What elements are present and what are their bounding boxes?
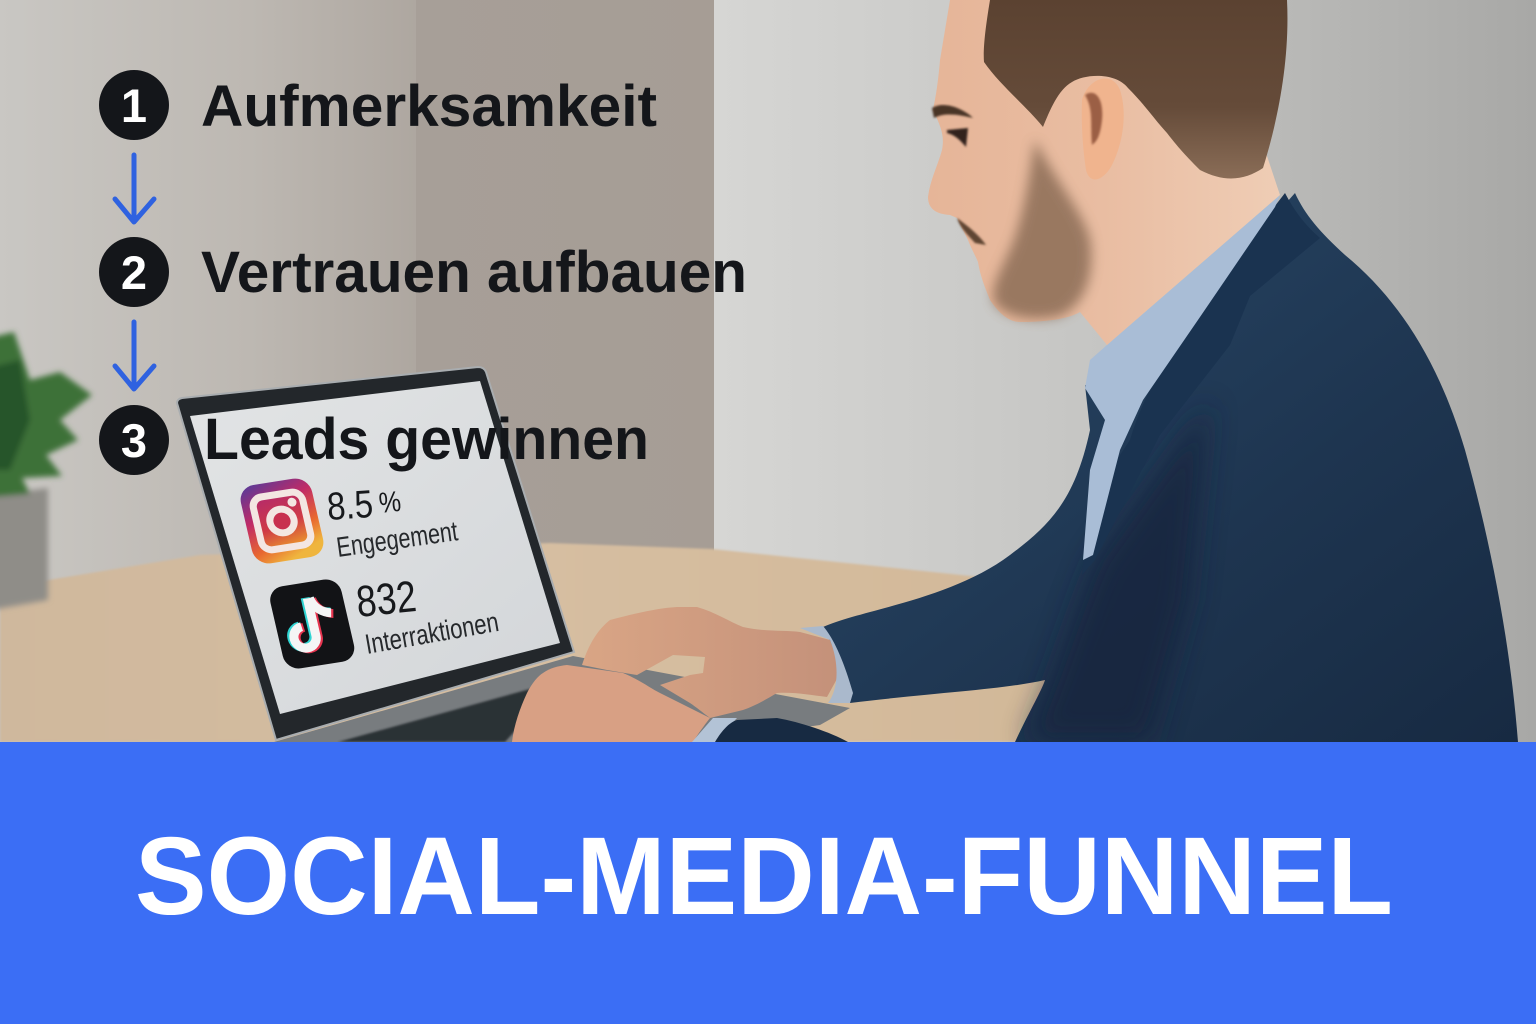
beard — [993, 140, 1091, 319]
laptop — [177, 367, 850, 742]
funnel steps — [99, 70, 747, 475]
arrow: step 1 to 2 — [115, 155, 154, 222]
stat: TikTok interactions: 832 — [354, 572, 419, 627]
step 3: 3 — [121, 414, 147, 467]
hair — [984, 0, 1287, 178]
icon: Instagram — [237, 476, 327, 566]
step 3: Leads gewinnen — [204, 407, 649, 472]
stat: Instagram engagement: 8.5 — [326, 483, 375, 529]
ear — [1082, 79, 1124, 179]
plant — [0, 332, 92, 612]
jacket shading — [1025, 400, 1210, 742]
person — [512, 0, 1518, 742]
stat: Instagram engagement: % — [377, 486, 403, 520]
step 2: 2 — [121, 246, 147, 299]
stat: Instagram engagement: Engegement — [335, 515, 460, 563]
shirt cuffs — [692, 626, 853, 742]
lower sleeve — [715, 718, 848, 742]
jacket body — [823, 193, 1518, 742]
moustache — [957, 218, 986, 245]
step 1: 1 — [121, 79, 147, 132]
face and neck — [928, 0, 1280, 345]
title banner — [0, 742, 1536, 1024]
eyebrow and eye — [932, 105, 973, 147]
icon: TikTok — [267, 577, 357, 671]
background: wooden table — [0, 543, 1100, 742]
front hand — [512, 665, 710, 742]
stat: TikTok interactions: Interraktionen — [363, 606, 501, 660]
stat: Instagram engagement — [326, 483, 460, 563]
laptop lid — [177, 367, 574, 740]
back hand — [582, 607, 839, 718]
step 1: Aufmerksamkeit — [201, 74, 657, 139]
background: room walls — [0, 0, 1536, 742]
arrow: step 2 to 3 — [115, 322, 154, 389]
stat: TikTok interactions — [354, 572, 501, 660]
laptop base and keyboard — [274, 656, 850, 742]
step 2: Vertrauen aufbauen — [201, 240, 747, 305]
title banner: SOCIAL-MEDIA-FUNNEL — [135, 815, 1393, 938]
shirt collar — [1083, 195, 1280, 560]
laptop screen — [190, 381, 560, 714]
jacket lapel — [1082, 193, 1320, 575]
